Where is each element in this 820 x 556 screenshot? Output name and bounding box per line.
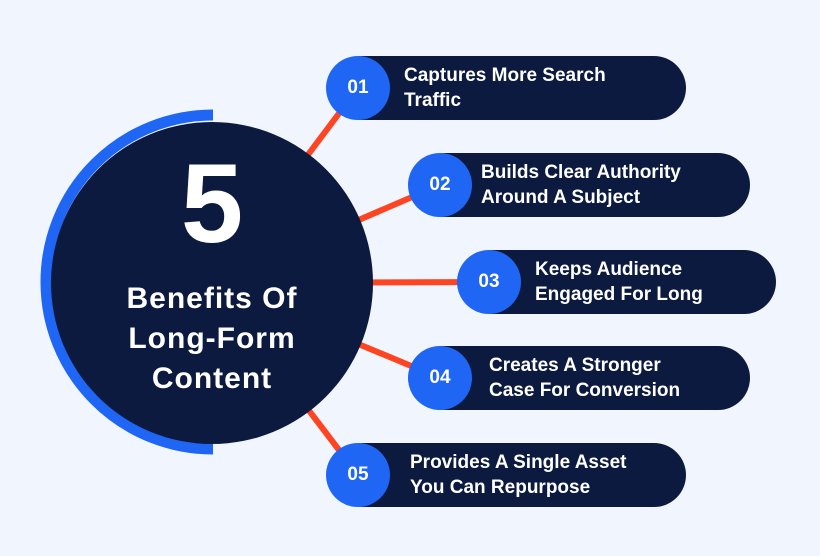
item 05: Provides A Single Asset bbox=[410, 452, 626, 473]
item 03 bbox=[461, 250, 776, 314]
item 02: Builds Clear Authority bbox=[481, 162, 681, 183]
main circle text: Long-Form bbox=[128, 322, 296, 355]
main circle text: Content bbox=[152, 362, 272, 395]
item 01: Traffic bbox=[404, 90, 461, 111]
badge 04: 04 bbox=[429, 367, 451, 388]
badge 03: 03 bbox=[478, 271, 500, 292]
item 02: Around A Subject bbox=[481, 187, 640, 208]
badge 05: 05 bbox=[347, 464, 369, 485]
badge 02 bbox=[408, 153, 472, 217]
badge 05 bbox=[326, 443, 390, 507]
badge 04 bbox=[408, 346, 472, 410]
badge 03 bbox=[457, 250, 521, 314]
main circle text bbox=[126, 141, 298, 395]
item 05 bbox=[330, 443, 686, 507]
main circle text: 5 bbox=[181, 141, 243, 266]
item 03: Engaged For Long bbox=[535, 284, 703, 305]
item 04: Case For Conversion bbox=[489, 380, 680, 401]
item 03: Keeps Audience bbox=[535, 259, 682, 280]
item 04 bbox=[412, 346, 750, 410]
badge 02: 02 bbox=[429, 174, 451, 195]
item 02 bbox=[412, 153, 750, 217]
item 05: You Can Repurpose bbox=[410, 477, 590, 498]
badge 01 bbox=[326, 56, 390, 120]
item 01: Captures More Search bbox=[404, 65, 606, 86]
main circle text: Benefits Of bbox=[126, 282, 298, 315]
item 01 bbox=[330, 56, 686, 120]
badge 01: 01 bbox=[347, 77, 369, 98]
item 04: Creates A Stronger bbox=[489, 355, 661, 376]
